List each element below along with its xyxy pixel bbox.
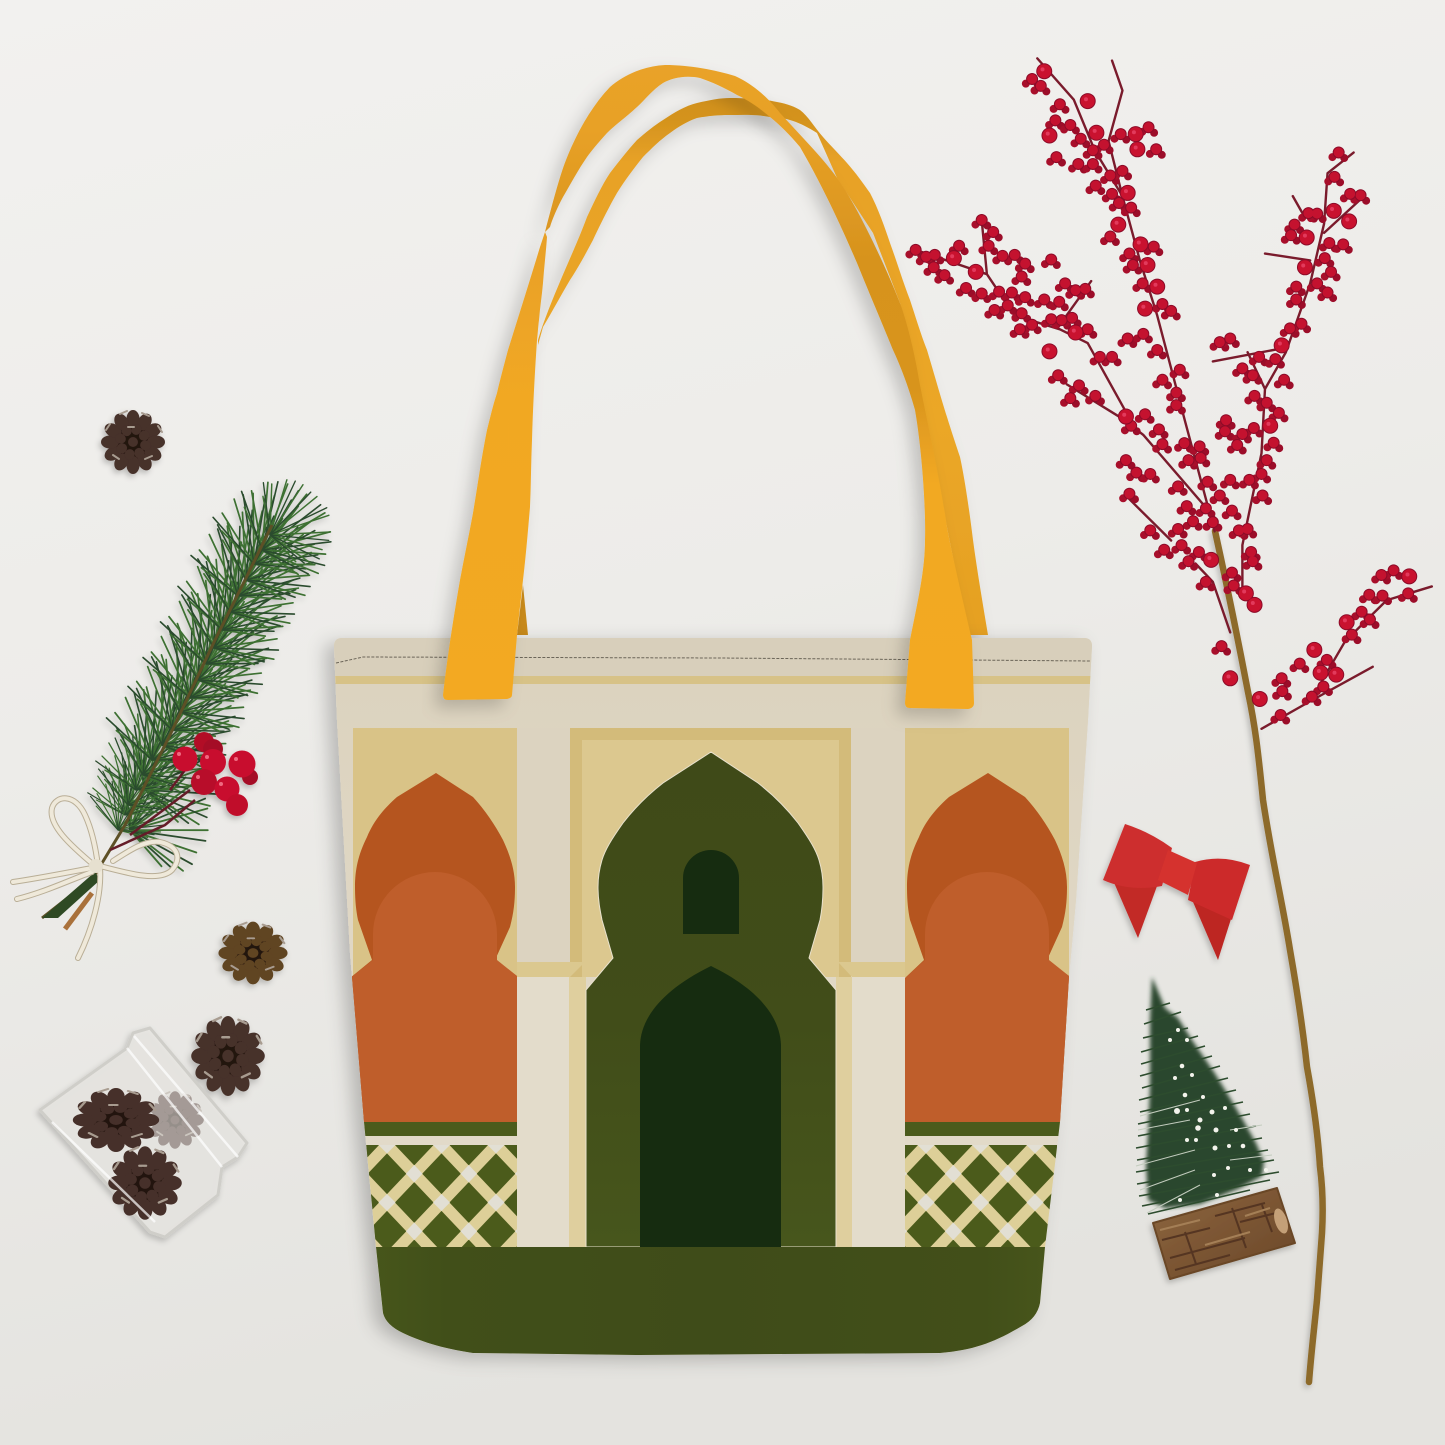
red ribbon bow: [1103, 824, 1250, 960]
bag artwork: [330, 636, 1100, 1362]
right tile border: [905, 1122, 1069, 1136]
pine cone middle: [218, 922, 288, 984]
top hem: [330, 636, 1100, 684]
jar highlights: [52, 1036, 238, 1222]
branch stem: [42, 525, 272, 918]
berry stalks: [110, 770, 195, 850]
handle: back left foot sliver: [517, 585, 528, 635]
brown stem: [1215, 531, 1323, 1382]
left tile border: [364, 1122, 517, 1136]
columns and lintels: [517, 962, 905, 1247]
right panel background: [905, 728, 1069, 977]
green base: [376, 1247, 1045, 1355]
right orange arch: [905, 773, 1069, 1122]
snow flecks: [1168, 1028, 1268, 1202]
tree foliage: [1146, 977, 1264, 1208]
centre panel frame: [570, 728, 851, 977]
berries filler: [909, 84, 1414, 721]
jar glass: [40, 1028, 247, 1237]
bottle brush tree: [1136, 977, 1295, 1279]
small window: [683, 850, 739, 934]
glass jar with cones: [40, 1028, 247, 1237]
centre green arch: [586, 752, 836, 1247]
twigs: [916, 58, 1432, 729]
left lattice: [366, 1145, 517, 1247]
cones inside: [73, 1088, 204, 1220]
needles: [83, 458, 353, 884]
pale bristles: [1136, 1100, 1272, 1213]
cream wall: [1085, 686, 1090, 762]
red berry branch: [909, 58, 1432, 1382]
dry fibres: [65, 893, 92, 929]
pine cone by jar: [191, 1016, 265, 1096]
left loop: [1103, 824, 1172, 888]
left panel background: [353, 728, 517, 977]
right lattice: [905, 1145, 1057, 1247]
berries and twigs: [909, 58, 1432, 729]
berries large: [952, 69, 1409, 699]
wood base: [1153, 1188, 1295, 1279]
stem end: [42, 872, 100, 918]
pine cone top: [101, 410, 165, 474]
twine bow: [13, 798, 177, 958]
pine sprig: [13, 458, 353, 958]
knot: [1158, 850, 1197, 895]
right tail: [1190, 895, 1237, 960]
bag body: [334, 638, 1092, 1355]
berries medium: [916, 79, 1408, 715]
handle: front strap over arc to right foot: [545, 65, 974, 709]
main door: [640, 966, 781, 1247]
right loop: [1188, 859, 1250, 920]
left tail: [1112, 878, 1160, 938]
tree bristles: [1136, 1003, 1279, 1214]
red berries: [172, 732, 258, 816]
handle: back strap: [538, 98, 988, 635]
left orange arch: [350, 773, 517, 1122]
handle: left front strap: [443, 232, 547, 700]
